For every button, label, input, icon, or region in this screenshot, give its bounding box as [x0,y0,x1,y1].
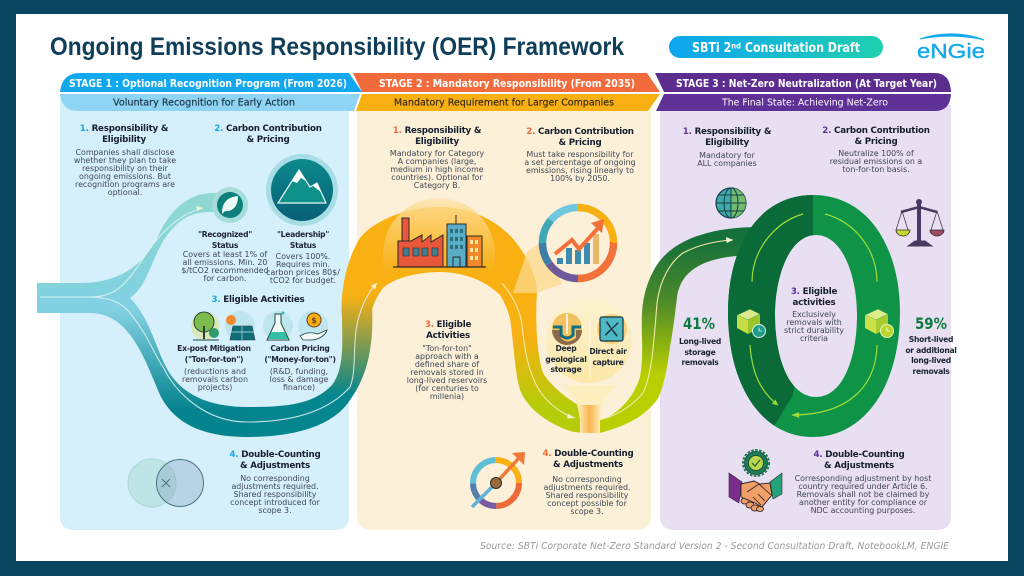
stage 3: responsibility heading [683,127,771,148]
stage 1: responsibility heading [80,124,168,145]
icon: venn diagram [128,459,204,507]
stage 1: double counting text: Shared responsibility [234,490,316,499]
stage 1: recognized status text [181,250,269,283]
ring: zero loop [728,195,900,437]
stage 2: double counting heading: & Adjustments [553,460,623,470]
badge: consultation draft: Consultation Draft [741,41,860,56]
title: Ongoing Emissions Responsibility (OER) Framework [50,33,624,61]
stage 1: leadership status text: Requires min. [276,260,330,269]
stat: 59%: 59% [915,314,947,333]
stage 3: activities text: criteria [800,334,828,343]
source note: Source: SBTi Corporate Net-Zero Standard Version 2 - Second Consultation Draft, NotebookLM, ENGIE [480,541,950,552]
stage 3: responsibility text: ALL companies [697,159,757,168]
stage 3: double counting heading [813,450,905,471]
stage 1: leadership status text: tCO2 for budget. [270,276,336,285]
stage 1: pricing heading: & Pricing [247,135,289,145]
stage 2: double counting text: concept possible for [547,499,627,508]
stage 2: responsibility text: Mandatory for Category [390,149,484,158]
stage 1: ex-post mitigation heading: Ex-post Mitigation [177,344,251,353]
stage 1: responsibility text: Companies shall disclose [75,148,174,157]
stage 1: carbon pricing text: loss & damage [270,375,328,384]
stage 2: responsibility text [390,149,484,190]
stage 2: responsibility heading: 1. Responsibility & [393,126,481,136]
header: stage 1: STAGE 1 : Optional Recognition Program (From 2026) [69,77,347,90]
stage 3: activities heading [791,287,837,308]
stage 2: double counting text: Shared responsibility [546,491,628,500]
stage 2: responsibility text: Category B. [414,181,460,190]
stage 2: double counting text [543,475,631,516]
stage 1: responsibility text: optional. [108,188,142,197]
stage 3: pricing text: residual emissions on a [830,157,922,166]
stage 2: responsibility text: medium in high income [390,165,484,174]
icon: solar panel [225,311,255,341]
stage 1: responsibility heading: Eligibility [102,135,146,145]
icon: box with clock (left) [737,309,766,338]
icon: hand with coin: $ [311,316,317,325]
panel: stage 3 [660,105,951,530]
stat: 41%: 41% [683,314,715,333]
stage 1: recognized status text: for carbon. [203,274,247,283]
stage 2: pricing heading [526,127,634,148]
stage 3: pricing heading: & Pricing [855,137,897,147]
stage 2: activities text: approach with a [415,352,479,361]
stage 2: activities text: (for centuries to [415,384,479,393]
stage 2: responsibility text: countries). Optional for [391,173,483,182]
stage 1: leadership status text: carbon prices 80$/ [266,268,340,277]
stage 1: responsibility text [74,148,176,197]
stage 2: activities heading: 3. Eligible [425,320,471,330]
stage 1: leadership status heading: Status [290,241,316,250]
stage 3: responsibility heading: Eligibility [705,138,749,148]
stage 1: pricing heading: 2. Carbon Contribution [214,124,322,134]
stage 2: responsibility heading: Eligibility [415,137,459,147]
header: stage 2 [353,73,660,92]
stage 2: direct air capture label: Direct air [589,347,627,356]
stage 1: leadership status text: Covers 100%. [276,252,330,261]
stage 1: responsibility text: whether they plan to take [74,156,176,165]
icon: factory and buildings [383,198,495,268]
stage 1: double counting text: scope 3. [258,506,292,515]
sub-header: stage 2: Mandatory Requirement for Larger Companies [394,98,614,108]
stage 1: carbon pricing text: finance) [283,383,315,392]
stage 1: double counting heading: & Adjustments [240,461,310,471]
stage 3: double counting text [795,474,932,515]
stage 1: ex-post mitigation heading: ("Ton-for-ton") [185,355,243,364]
stage 1: responsibility text: ongoing emissions. But [79,172,171,181]
logo: ENGIE [917,34,985,63]
logo: ENGIE: eNGie [917,41,985,63]
icon: globe [716,188,746,218]
stage 2: activities text: long-lived reservoirs [407,376,487,385]
stage 2: activities heading: Activities [426,331,470,341]
stage 1: ex-post mitigation text: removals carbon [182,375,248,384]
stage 2: pricing text: emissions, rising linearly to [526,166,634,175]
badge: consultation draft [669,36,883,58]
callout: storage technologies [546,297,632,433]
sub-header: stage 3 [656,94,951,111]
stage 1: leadership status heading: "Leadership" [277,230,329,239]
stage 3: long-lived label: Long-lived [679,337,721,346]
stage 1: leadership status heading [277,230,329,250]
stage 3: responsibility text [697,151,757,168]
panel: stage 2 [357,105,651,530]
stage 3: short-lived label [905,335,957,376]
stage 1: carbon pricing text: (R&D, funding, [270,367,328,376]
stage 2: direct air capture label [589,347,627,367]
stage 1: recognized status heading [198,230,252,250]
stage 2: deep geological storage label: geological [545,355,587,364]
badge: consultation draft: SBTi 2 [692,41,738,56]
stage 3: pricing text [830,149,922,174]
stage 2: double counting heading [542,449,634,470]
stage 2: activities text: millenia) [430,392,464,401]
icon: handshake with badge [729,450,782,512]
stage 3: double counting text: another entity for compliance or [799,498,927,507]
stage 3: double counting text: NDC accounting purposes. [811,506,915,515]
icon: mountain [266,154,338,226]
sub-header: stage 1 [60,94,360,111]
stage 2: activities heading [425,320,471,341]
stage 1: carbon pricing heading: ("Money-for-ton") [264,355,336,364]
stage 1: pricing heading [214,124,322,145]
stage 1: recognized status heading: "Recognized" [198,230,252,239]
stage 1: recognized status text: $/tCO2 recommended [181,266,269,275]
stage 3: short-lived label: long-lived [911,356,951,365]
stage 1: double counting heading: 4. Double-Counting [229,450,321,460]
header: stage 1 [60,73,362,92]
stage 1: double counting heading [229,450,321,471]
stage 3: double counting text: country required under Article 6. [798,482,928,491]
stage 2: pricing heading: & Pricing [559,138,601,148]
icon: leaf [212,187,248,223]
stage 1: carbon pricing text [270,367,328,392]
stage 3: activities heading: activities [793,298,835,308]
sub-header: stage 3: The Final State: Achieving Net-Zero [721,98,888,108]
stage 1: recognized status heading: Status [212,241,238,250]
icon: deep geological storage [552,313,582,345]
stage 2: activities text [407,344,487,401]
stage 3: double counting heading: 4. Double-Counting [813,450,905,460]
icon: tree [191,312,219,340]
stage 1: leadership status text [266,252,340,285]
icon: direct air capture [597,314,627,344]
stage 3: activities text [784,310,844,343]
icon: growth chart ring [513,204,617,293]
stage 3: short-lived label: or additional [905,346,957,355]
sub-header: stage 1: Voluntary Recognition for Early Action [113,98,295,108]
icon: scales [896,199,944,246]
stage 2: activities text: "Ton-for-ton" [422,344,472,353]
panel: stage 1 [60,95,349,530]
stage 2: pricing text [524,150,636,183]
stage 1: ex-post mitigation text: (reductions and [184,367,246,376]
stage 3: pricing heading [822,126,930,147]
stage 3: double counting text: Corresponding adjustment by host [795,474,931,483]
stage 1: ex-post mitigation text [182,367,248,392]
stage 1: ex-post mitigation heading [177,344,251,364]
stage 3: responsibility text: Mandatory for [699,151,755,160]
stage 1: responsibility text: responsibility on their [82,164,168,173]
badge: consultation draft: nd [731,42,741,50]
stage 3: long-lived label [679,337,721,367]
stage 2: activities text: defined share of [415,360,479,369]
icon: flask [263,311,293,341]
stage 3: long-lived label: storage [685,348,715,357]
stage 3: responsibility heading: 1. Responsibility & [683,127,771,137]
stage 1: activities heading: 3. Eligible Activities [211,295,305,305]
icon: compass arrow [472,452,525,507]
stage 3: short-lived label: removals [912,367,950,376]
icon: hand with coin [298,311,328,341]
stage 1: double counting text: No corresponding [240,474,310,483]
stage 2: activities text: removals stored in [410,368,484,377]
stage 1: responsibility text: recognition programs are [75,180,175,189]
stage 1: recognized status text: all emissions. Min. 20 [183,258,267,267]
stage 2: double counting text: adjustments required. [543,483,631,492]
stage 1: double counting text [230,474,320,515]
header: stage 3 [655,73,951,92]
stage 2: pricing text: 100% by 2050. [550,174,610,183]
stage 2: pricing text: a set percentage of ongoing [524,158,636,167]
stage 3: long-lived label: removals [681,358,719,367]
stage 3: pricing heading: 2. Carbon Contribution [822,126,930,136]
stage 3: pricing text: Neutralize 100% of [838,149,914,158]
stage 1: carbon pricing heading: Carbon Pricing [270,344,330,353]
stage 3: activities text: removals with [786,318,842,327]
stage 2: double counting text: No corresponding [552,475,622,484]
stage 2: double counting heading: 4. Double-Counting [542,449,634,459]
stage 2: pricing heading: 2. Carbon Contribution [526,127,634,137]
stage 2: deep geological storage label: Deep [556,344,576,353]
header: stage 2: STAGE 2 : Mandatory Responsibility (From 2035) [379,77,635,90]
stage 1: responsibility heading: 1. Responsibility & [80,124,168,134]
stage 1: carbon pricing heading [264,344,336,364]
stage 2: pricing text: Must take responsibility for [526,150,633,159]
stage 3: double counting heading: & Adjustments [824,461,894,471]
stage 3: activities text: strict durability [784,326,844,335]
stage 2: responsibility text: A companies (large, [398,157,476,166]
stage 3: short-lived label: Short-lived [909,335,953,344]
stage 1: double counting text: adjustments required. [231,482,319,491]
stage 3: pricing text: ton-for-ton basis. [842,165,910,174]
stage 1: double counting text: concept introduced for [230,498,320,507]
sub-header: stage 2 [356,94,660,111]
stage 3: activities text: Exclusively [792,310,836,319]
stage 2: deep geological storage label [545,344,587,374]
stage 2: direct air capture label: capture [592,358,624,367]
stage 2: double counting text: scope 3. [570,507,604,516]
stage 2: deep geological storage label: storage [551,365,581,374]
flow ribbon [37,193,760,437]
stage 1: ex-post mitigation text: projects) [198,383,232,392]
stage 1: recognized status text: Covers at least 1% of [183,250,267,259]
stage 2: responsibility heading [393,126,481,147]
header: stage 3: STAGE 3 : Net-Zero Neutralization (At Target Year) [676,77,937,90]
icon: box with clock (right) [865,309,894,338]
stage 3: activities heading: 3. Eligible [791,287,837,297]
stage 3: double counting text: Removals shall not be claimed by [797,490,929,499]
